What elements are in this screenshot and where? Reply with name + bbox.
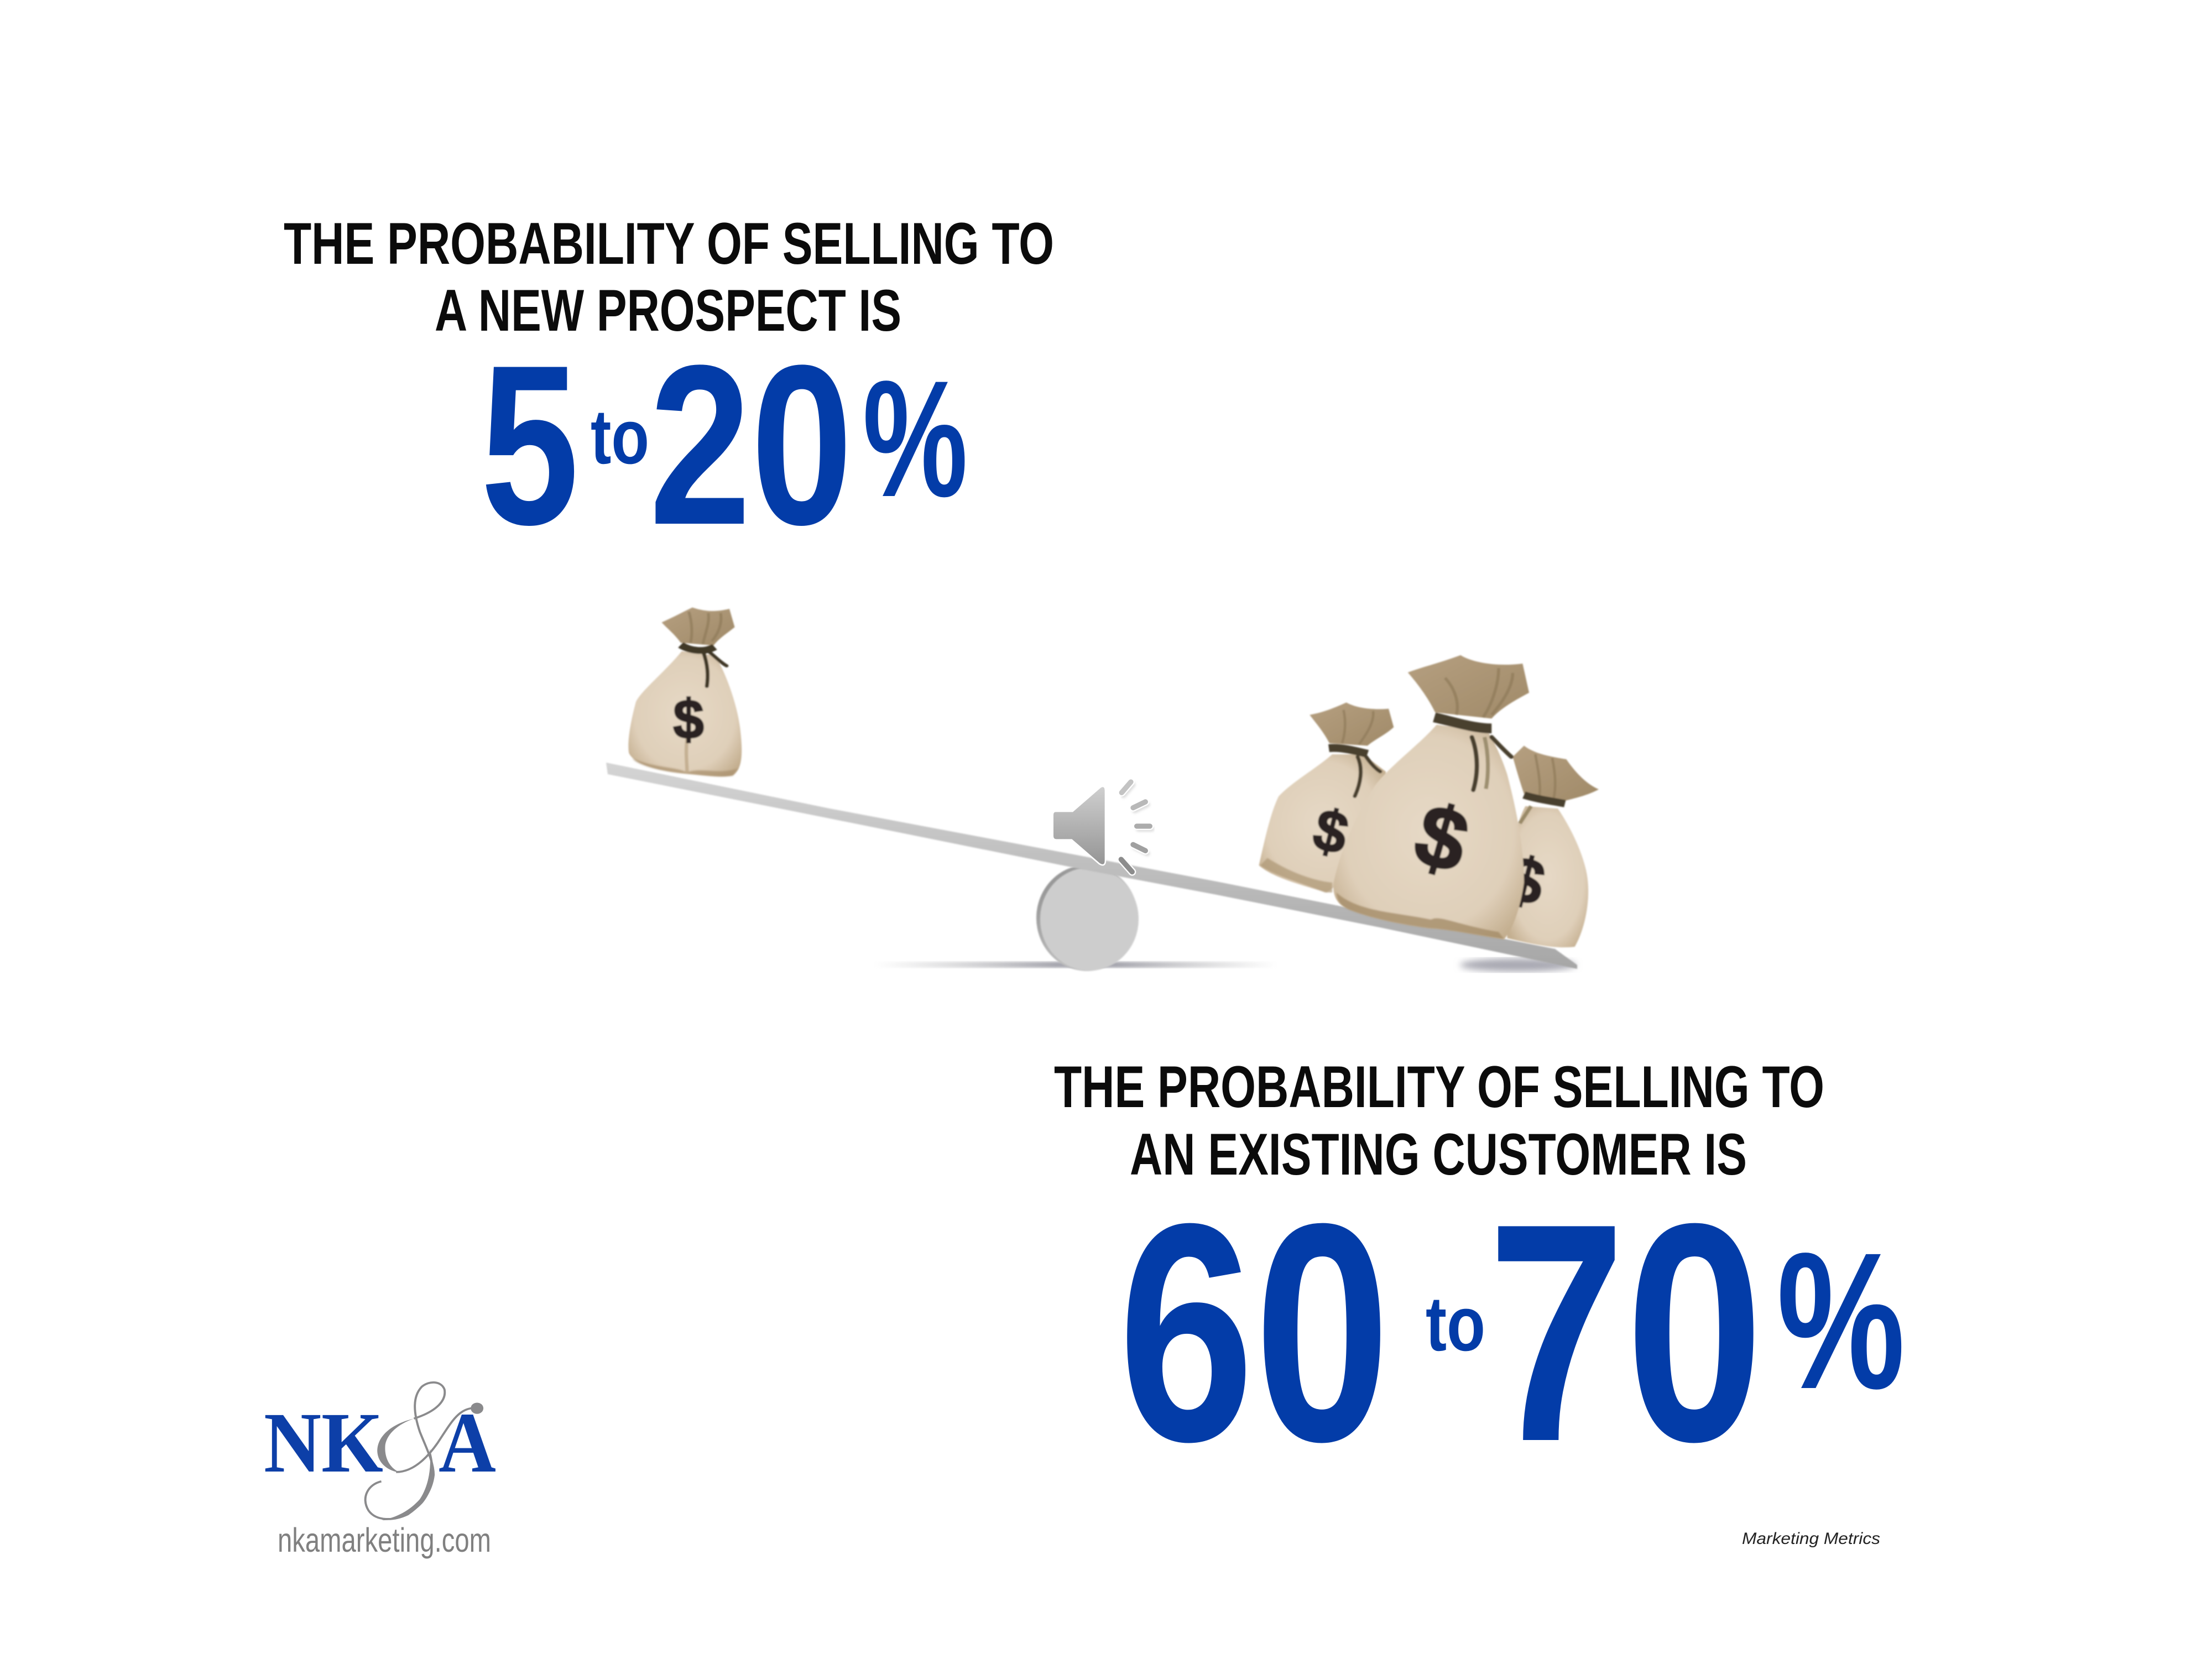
number: 70: 70 xyxy=(1488,1159,1764,1506)
website url: nkamarketing.com xyxy=(278,1521,491,1559)
logo: NK&A xyxy=(264,1383,496,1559)
bag: large centre: $ xyxy=(1405,785,1478,892)
bag: medium left: $ xyxy=(1307,796,1354,867)
number: 20: 20 xyxy=(649,318,853,572)
text: percent sign: % xyxy=(863,346,968,531)
text: percent sign: % xyxy=(1777,1212,1905,1430)
shadow under beam tip xyxy=(1460,958,1576,972)
bag: large centre xyxy=(1333,655,1529,940)
heading: new prospect line 2: A NEW PROSPECT IS xyxy=(435,277,901,343)
illustration: seesaw with money bags xyxy=(606,607,1599,972)
logo letters NK: NK xyxy=(264,1395,383,1490)
heading: existing customer line 1: THE PROBABILITY OF SELLING TO xyxy=(1054,1053,1824,1120)
logo letter A: A xyxy=(439,1395,496,1490)
money bag: single on left: $ xyxy=(673,688,704,750)
ground shadow under pivot xyxy=(875,962,1277,968)
speaker sound waves xyxy=(1121,782,1152,872)
bag: small right xyxy=(1500,745,1599,947)
speaker cone xyxy=(1053,787,1105,864)
heading: new prospect line 1: THE PROBABILITY OF SELLING TO xyxy=(284,210,1054,276)
panel: new prospect statistic xyxy=(284,210,1054,572)
text: to: to xyxy=(1426,1280,1485,1367)
icon: audio speaker xyxy=(1053,782,1152,872)
number: 5: 5 xyxy=(481,318,579,572)
seesaw beam xyxy=(606,763,1577,969)
pivot cylinder xyxy=(1036,865,1139,971)
heading: existing customer line 2: AN EXISTING CUSTOMER IS xyxy=(1130,1121,1747,1187)
panel: existing customer statistic xyxy=(1054,1053,1905,1506)
source note: Marketing Metrics xyxy=(1742,1530,1880,1548)
number: 60: 60 xyxy=(1118,1159,1390,1506)
money bag: single on left xyxy=(628,607,742,776)
logo ampersand swash xyxy=(366,1383,483,1520)
bag: small right: $ xyxy=(1500,842,1552,920)
bag: medium left xyxy=(1259,702,1394,893)
text: to: to xyxy=(591,393,649,480)
money bags: group of three on right xyxy=(1259,655,1599,947)
